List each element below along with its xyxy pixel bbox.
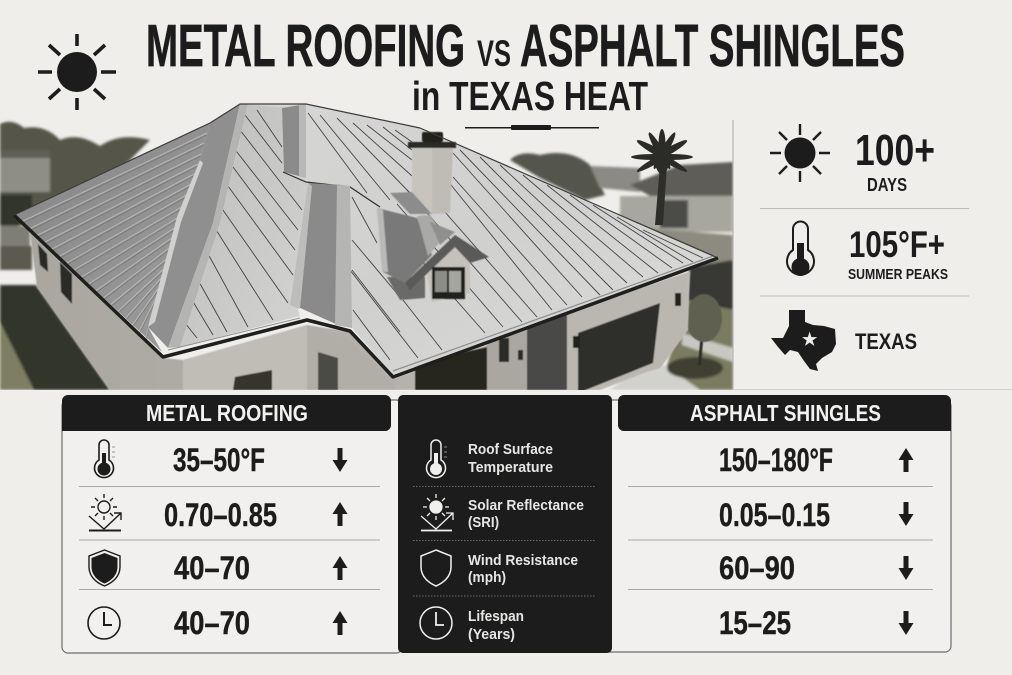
row: wind resistance: 40–70 — [174, 550, 250, 586]
icon: thermometer filled — [94, 440, 115, 478]
title: METAL ROOFING — [146, 13, 465, 79]
icon: clock outline — [420, 607, 452, 639]
stat: texas: TEXAS — [855, 329, 917, 354]
asphalt shingles header: ASPHALT SHINGLES — [690, 400, 881, 426]
hip light strip — [168, 104, 248, 348]
metal roofing header — [62, 395, 391, 431]
label: roof surface temperature: Roof Surface — [468, 442, 553, 458]
row: roof surface temperature — [173, 442, 348, 478]
panel: asphalt shingles — [600, 395, 951, 652]
left face seams — [21, 133, 207, 343]
hip ridge band — [148, 104, 240, 348]
asphalt shingles header — [618, 395, 951, 431]
row: wind resistance: 60–90 — [719, 550, 795, 586]
icon: shield filled — [89, 550, 120, 586]
metal roofing header: METAL ROOFING — [146, 400, 308, 426]
palm tree — [631, 129, 693, 225]
row: lifespan: 15–25 — [719, 605, 791, 641]
label: wind resistance: (mph) — [468, 570, 506, 586]
center face seams — [185, 110, 302, 338]
right face standing seams — [308, 113, 703, 360]
stat: 100+ days — [855, 126, 935, 195]
stat: 100+ days: 100+ — [855, 126, 935, 175]
label: lifespan — [468, 609, 524, 643]
icon: sun — [770, 124, 830, 182]
dormer — [377, 208, 489, 302]
label: lifespan: Lifespan — [468, 609, 524, 625]
panel: metal roofing — [62, 395, 402, 653]
right main roof face — [240, 104, 716, 375]
left hip roof face — [14, 123, 210, 352]
icon: title sun — [38, 34, 116, 110]
label: lifespan: (Years) — [468, 627, 515, 643]
subtitle: in TEXAS HEAT — [412, 73, 648, 119]
background trees and house, right — [510, 153, 733, 390]
label: solar reflectance: Solar Reflectance — [468, 498, 584, 514]
title divider — [465, 125, 599, 130]
label: solar reflectance: (SRI) — [468, 515, 499, 531]
stat: 100+ days: DAYS — [867, 175, 907, 195]
chimney — [390, 132, 456, 214]
label: roof surface temperature: Temperature — [468, 460, 553, 476]
row: lifespan: 40–70 — [174, 605, 250, 641]
row: solar reflectance: 0.05–0.15 — [719, 497, 830, 533]
valley block lower — [290, 183, 352, 328]
center roof face — [180, 105, 308, 347]
row: wind resistance — [719, 550, 914, 586]
photo right edge line — [732, 120, 734, 390]
row: lifespan — [174, 605, 348, 641]
title — [146, 13, 905, 79]
row: roof surface temperature: 35–50°F — [173, 442, 265, 478]
row: wind resistance — [174, 550, 348, 586]
house walls — [30, 232, 690, 393]
background trees and house, left — [0, 122, 150, 390]
small front tree — [686, 294, 722, 365]
label: solar reflectance — [468, 498, 584, 531]
icon: shield outline — [421, 550, 451, 586]
icon: texas map: ★ — [802, 330, 818, 349]
stat: 105F+ summer peaks: SUMMER PEAKS — [848, 266, 948, 283]
icon: thermometer — [787, 222, 814, 276]
label: wind resistance — [468, 553, 578, 586]
title: VS — [477, 33, 511, 74]
icon: thermometer outline — [426, 440, 447, 478]
stat panel: texas heat facts — [760, 124, 969, 371]
icon: clock — [88, 607, 120, 639]
row: lifespan — [719, 605, 914, 641]
valley seam line — [283, 172, 380, 207]
row: solar reflectance: 0.70–0.85 — [164, 497, 277, 533]
panel: center metric labels — [398, 395, 612, 653]
label: roof surface temperature — [468, 442, 553, 476]
photo: metal roof house — [0, 104, 733, 393]
valley block upper — [282, 104, 306, 178]
stat: 105F+ summer peaks: 105°F+ — [849, 224, 945, 265]
eaves and gutters — [14, 104, 718, 377]
row: roof surface temperature: 150–180°F — [719, 442, 833, 478]
stat: 105F+ summer peaks — [848, 224, 948, 283]
icon: solar reflectance outline — [421, 494, 453, 530]
label: wind resistance: Wind Resistance — [468, 553, 578, 569]
icon: texas map — [771, 310, 836, 371]
icon: solar reflectance — [89, 494, 121, 530]
